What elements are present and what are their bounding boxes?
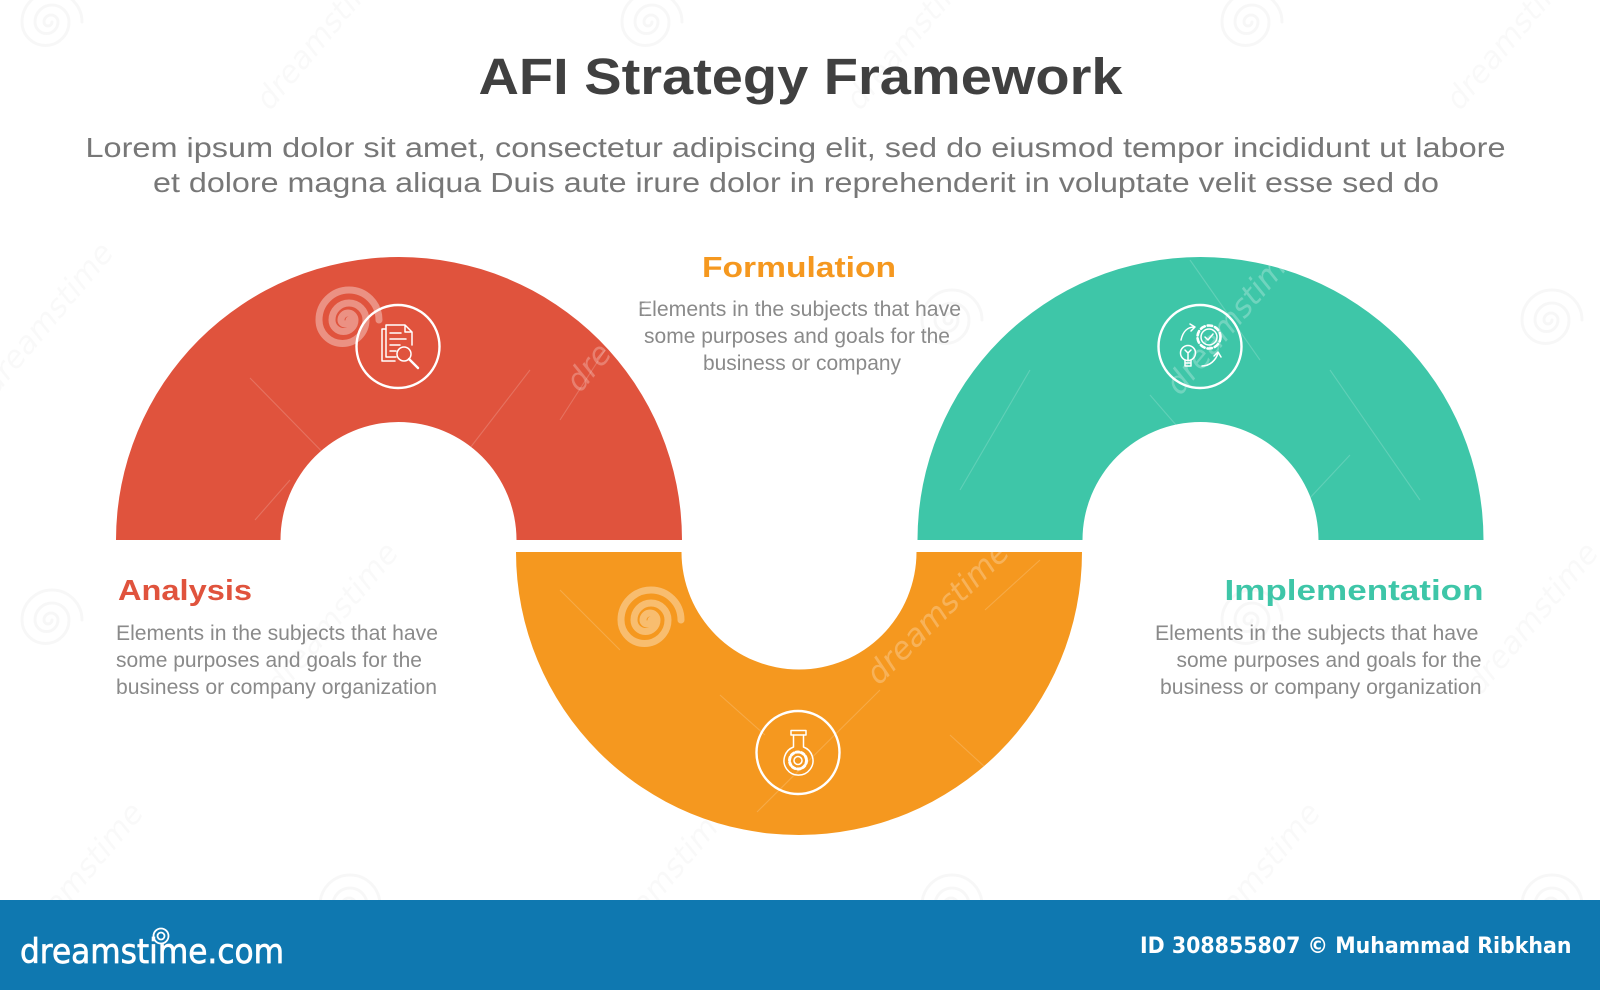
watermark layer on white background: dreamstime	[3, 795, 151, 962]
icon: bulb, gear and arrows	[1158, 305, 1242, 388]
text block: formulation description: Elements in the subjects that have	[638, 297, 961, 321]
arch: implementation (teal)	[918, 257, 1484, 540]
heading: implementation: Implementation	[1224, 575, 1484, 607]
text block: implementation description: business or company organization	[1160, 675, 1482, 699]
text block: implementation description: some purposes and goals for the	[1176, 648, 1482, 672]
footer logo: dreamstime.com	[20, 932, 284, 972]
panel: analysis text	[116, 575, 438, 699]
text block: analysis description: business or company organization	[116, 675, 437, 699]
text block: implementation description: Elements in the subjects that have	[1155, 621, 1478, 645]
watermark layer over coloured shapes: dreamstime	[1158, 235, 1306, 402]
panel: implementation text	[1155, 575, 1484, 699]
watermark layer on white background: dreamstime	[1180, 795, 1328, 962]
watermark layer over coloured shapes: dreamstime	[859, 534, 1017, 692]
footer banner	[0, 900, 1600, 990]
footer credit: ID 308855807 © Muhammad Ribkhan	[1140, 934, 1572, 959]
icon: logo spiral	[154, 928, 168, 944]
text block: formulation description: some purposes and goals for the	[644, 324, 950, 348]
watermark layer on white background: dreamstime	[258, 535, 406, 702]
heading: analysis: Analysis	[118, 575, 252, 607]
text block: analysis description: some purposes and goals for the	[116, 648, 422, 672]
text block: analysis description: Elements in the subjects that have	[116, 621, 438, 645]
heading: formulation: Formulation	[702, 252, 896, 284]
panel: formulation text	[638, 252, 961, 375]
text block: formulation description	[638, 297, 961, 375]
icon: document with magnifier	[356, 305, 440, 388]
watermark layer on white background: dreamstime	[590, 795, 738, 962]
text block: formulation description: business or company	[703, 351, 901, 375]
subtitle: Lorem ipsum dolor sit amet, consectetur adipiscing elit, sed do eiusmod tempor incididunt ut labore	[86, 132, 1506, 163]
text block: implementation description	[1155, 621, 1482, 699]
watermark layer over coloured shapes	[250, 232, 1420, 812]
text block: analysis description	[116, 621, 438, 699]
subtitle	[86, 132, 1506, 198]
watermark layer over coloured shapes: dreamstime	[558, 232, 706, 399]
arch: analysis (red)	[116, 257, 682, 540]
subtitle: et dolore magna aliqua Duis aute irure dolor in reprehenderit in voluptate velit esse sed do	[153, 167, 1439, 198]
title: AFI Strategy Framework	[478, 48, 1123, 105]
arch: formulation (orange)	[516, 552, 1082, 835]
icon: flask with gear	[756, 711, 840, 794]
